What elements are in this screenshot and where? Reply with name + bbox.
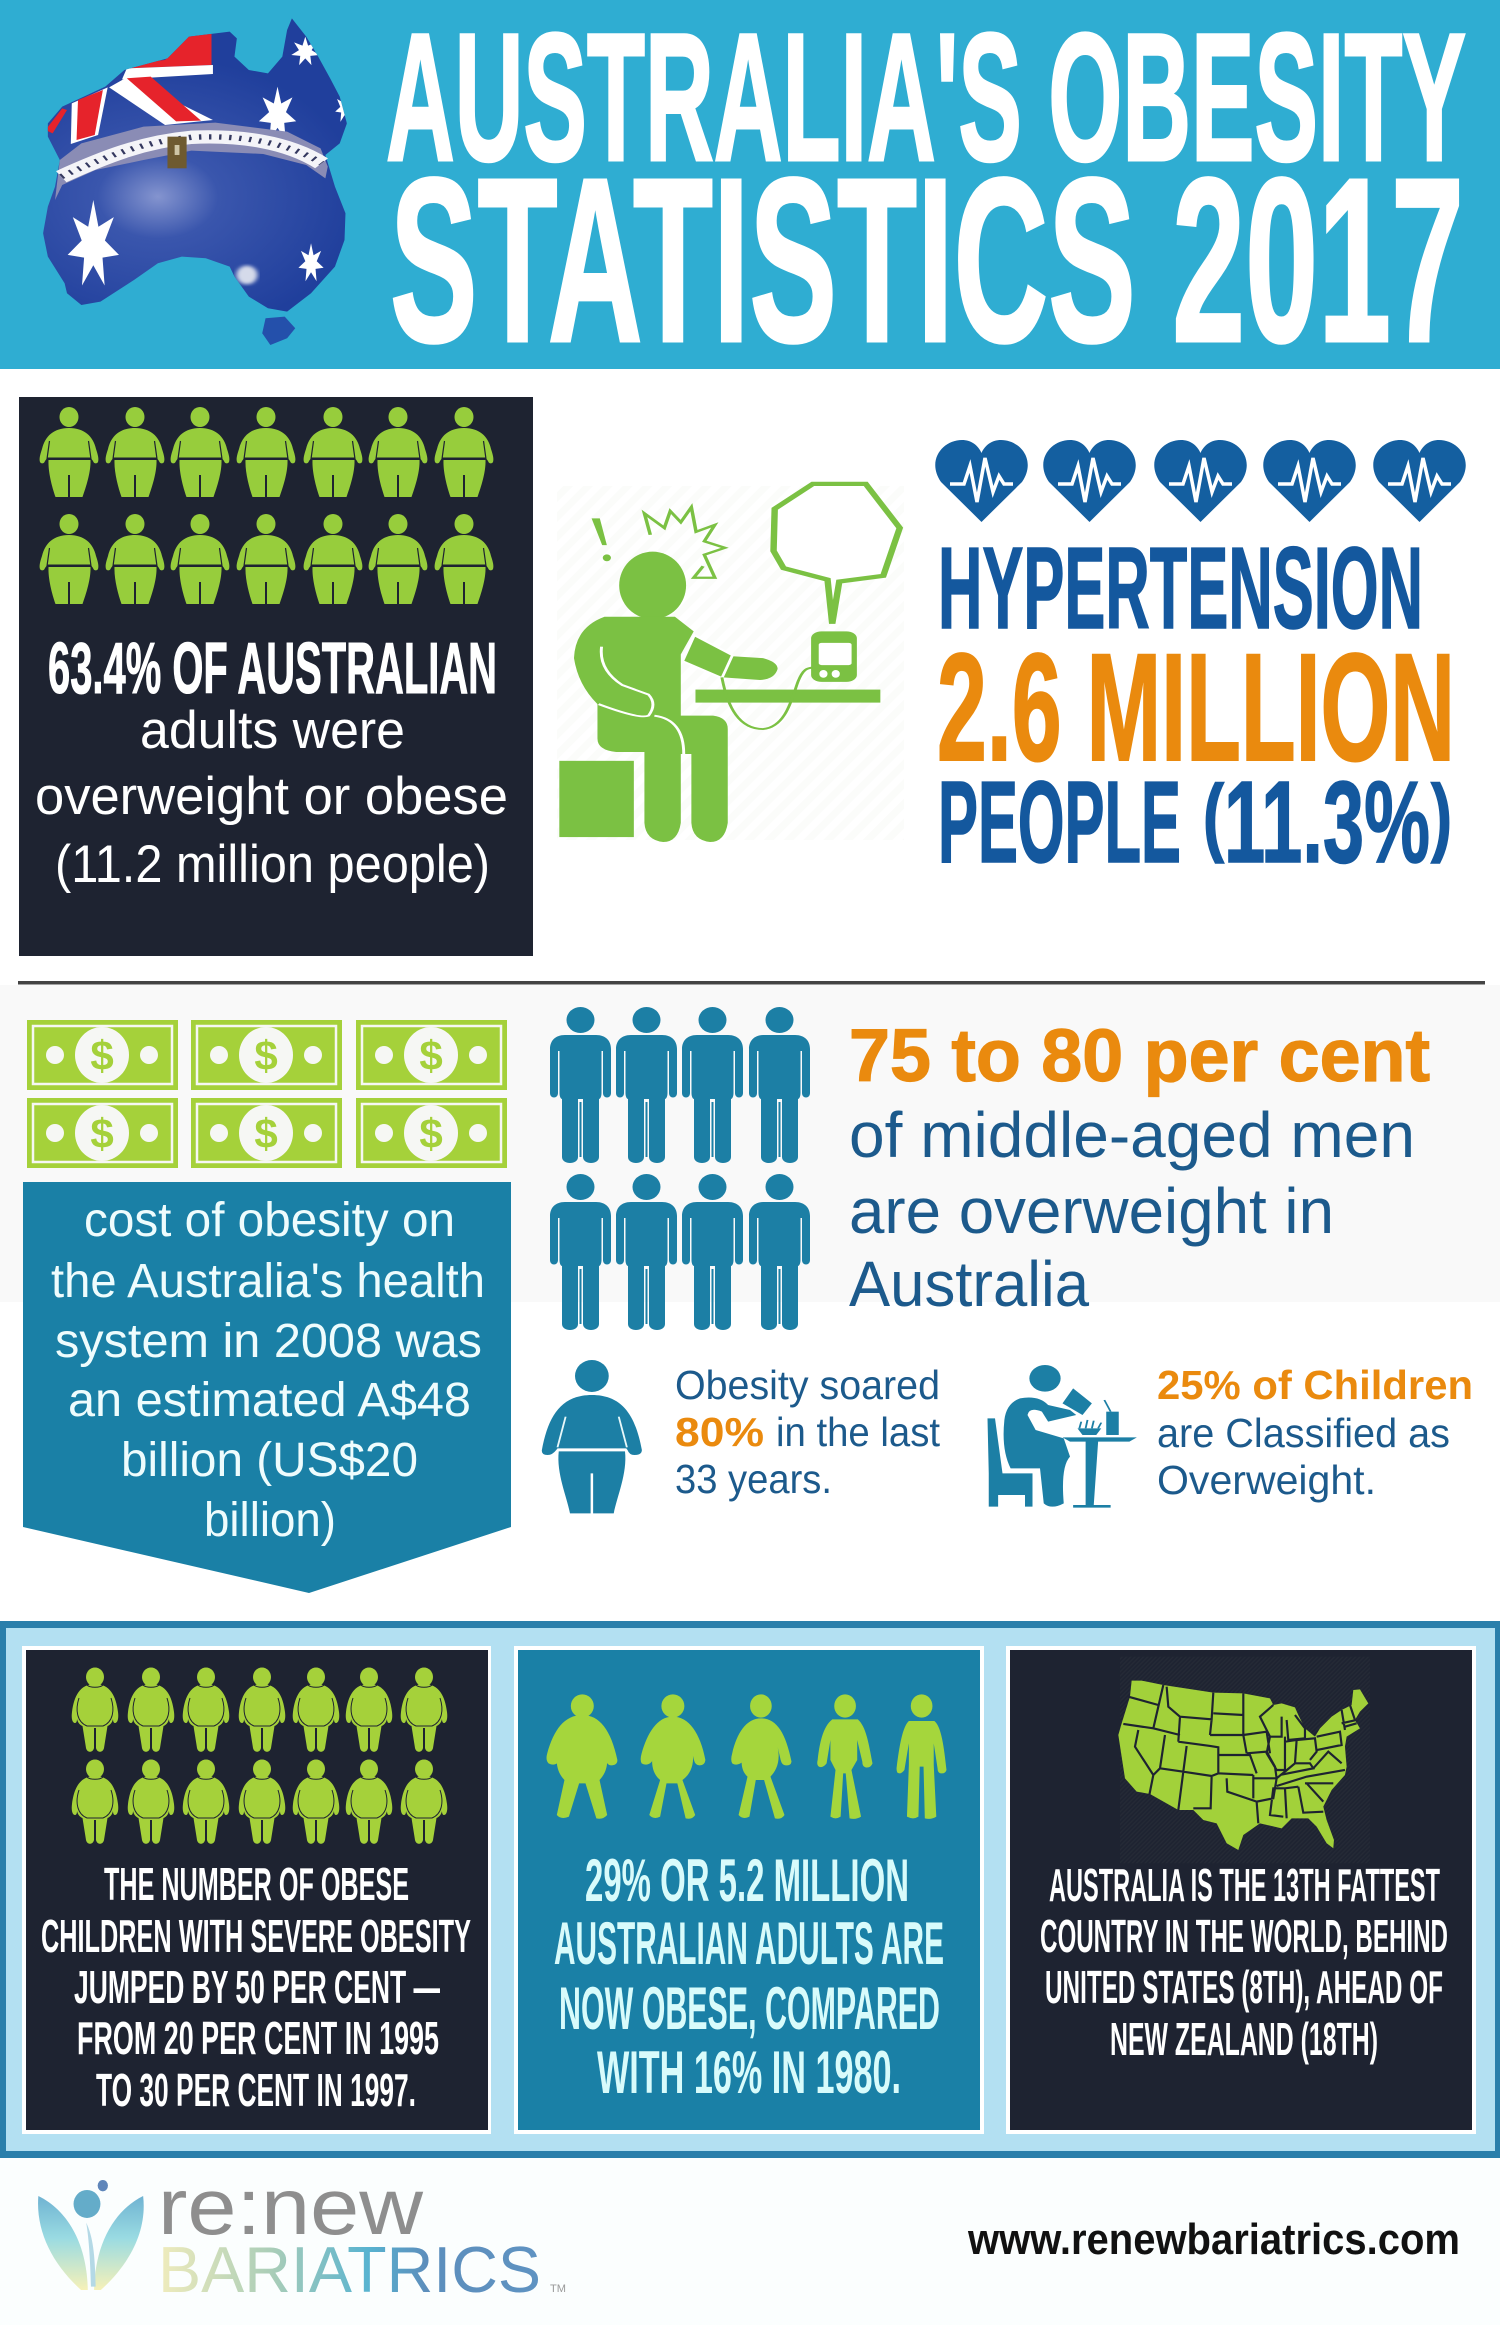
title <box>386 0 1466 391</box>
text: middle-aged men statistic: are overweight in <box>849 1175 1334 1247</box>
icon group: banknotes: $ <box>419 1110 443 1157</box>
text: adults statistic <box>35 629 508 894</box>
header banner <box>0 0 1500 391</box>
text: severe obesity: CHILDREN WITH SEVERE OBESITY <box>41 1910 471 1962</box>
text: severe obesity: FROM 20 PER CENT IN 1995 <box>77 2012 439 2064</box>
text: obesity soared: Obesity soared <box>675 1362 940 1408</box>
text: severe obesity: THE NUMBER OF OBESE <box>104 1858 409 1910</box>
icon row: hearts with ecg <box>935 440 1466 522</box>
text: middle-aged men statistic: of middle-aged men <box>849 1099 1415 1171</box>
text: children overweight: Overweight. <box>1157 1457 1376 1503</box>
text: severe obesity <box>41 1858 471 2116</box>
text: ranking <box>1040 1859 1448 2065</box>
panel: global ranking <box>1006 1646 1476 2134</box>
text: adult obesity <box>554 1847 944 2106</box>
icon group: banknotes: $ <box>254 1110 278 1157</box>
text: adults statistic: adults were <box>140 701 405 760</box>
icon group: banknotes <box>27 1020 507 1168</box>
text: children overweight: 25% of Children <box>1157 1362 1473 1408</box>
panel: cost of obesity callout: system in 2008 was <box>55 1315 482 1368</box>
icon group: banknotes: $ <box>419 1032 443 1079</box>
text: adults statistic: overweight or obese <box>35 767 508 826</box>
logo: renew bariatrics: re:new <box>158 2162 423 2251</box>
text: obesity soared: in the last <box>776 1409 941 1455</box>
icon group: banknotes: $ <box>254 1032 278 1079</box>
panel: cost of obesity callout: cost of obesity on <box>84 1194 455 1247</box>
text: children overweight <box>1157 1362 1473 1503</box>
text: adults statistic: 63.4% OF AUSTRALIAN <box>48 629 497 709</box>
panel: bottom frame <box>0 1621 1500 2158</box>
panel: adult obesity growth: AUSTRALIAN ADULTS ARE <box>554 1910 944 1977</box>
website url: www.renewbariatrics.com <box>967 2215 1460 2264</box>
icon: Australia map with flag and measuring tape <box>43 18 347 345</box>
icon: logo flower <box>38 2180 144 2290</box>
icon rows: obese children <box>72 1668 447 1844</box>
icon group: banknotes: $ <box>90 1032 114 1079</box>
text: hypertension <box>937 523 1455 887</box>
icon group: banknotes: $ <box>90 1110 114 1157</box>
text: middle-aged men statistic: 75 to 80 per cent <box>849 1014 1430 1097</box>
text: middle-aged men statistic: Australia <box>849 1248 1089 1320</box>
text: adult obesity: WITH 16% IN 1980. <box>597 2039 901 2106</box>
panel: cost of obesity callout: billion) <box>204 1494 336 1547</box>
panel: adult obesity growth <box>514 1646 984 2134</box>
text: severe obesity: TO 30 PER CENT IN 1997. <box>96 2064 416 2116</box>
icon: person having blood pressure measured <box>557 484 904 842</box>
text: severe obesity: JUMPED BY 50 PER CENT — <box>74 1961 440 2013</box>
text: adults statistic: (11.2 million people) <box>55 835 490 894</box>
text: obesity soared: 33 years. <box>675 1456 832 1502</box>
panel: cost of obesity callout: the Australia's health <box>51 1255 485 1308</box>
icon: obese man <box>542 1360 642 1513</box>
panel: cost of obesity callout <box>23 1182 511 1593</box>
text: hypertension: PEOPLE <box>938 757 1181 887</box>
icon group: middle-aged men <box>550 1007 810 1330</box>
logo: renew bariatrics <box>38 2162 566 2306</box>
map: United States <box>1118 1657 1370 1863</box>
text: obesity soared <box>675 1362 941 1502</box>
text: children overweight: are Classified as <box>1157 1410 1450 1456</box>
panel: severe obesity in children <box>22 1646 491 2134</box>
panel: cost of obesity callout: an estimated A$48 <box>68 1374 471 1427</box>
logo: renew bariatrics: TM <box>550 2283 566 2295</box>
text: adult obesity: 29% OR 5.2 MILLION <box>585 1847 909 1914</box>
text: adult obesity: NOW OBESE, COMPARED <box>559 1975 940 2042</box>
text: hypertension: ( <box>1203 768 1224 864</box>
icon: child eating at table <box>988 1365 1137 1508</box>
text: hypertension: ) <box>1431 768 1452 864</box>
footer <box>0 2158 1500 2325</box>
panel: cost of obesity callout: billion (US$20 <box>121 1434 418 1487</box>
text: middle-aged men statistic <box>849 1014 1430 1320</box>
icon row: figures from large to small <box>547 1694 946 1819</box>
text: obesity soared: 80% <box>675 1409 764 1455</box>
logo: renew bariatrics: BARIATRICS <box>158 2233 541 2306</box>
icon row: overweight figures <box>40 407 493 604</box>
hypertension statistic <box>935 440 1466 887</box>
panel: adults overweight <box>19 397 533 956</box>
